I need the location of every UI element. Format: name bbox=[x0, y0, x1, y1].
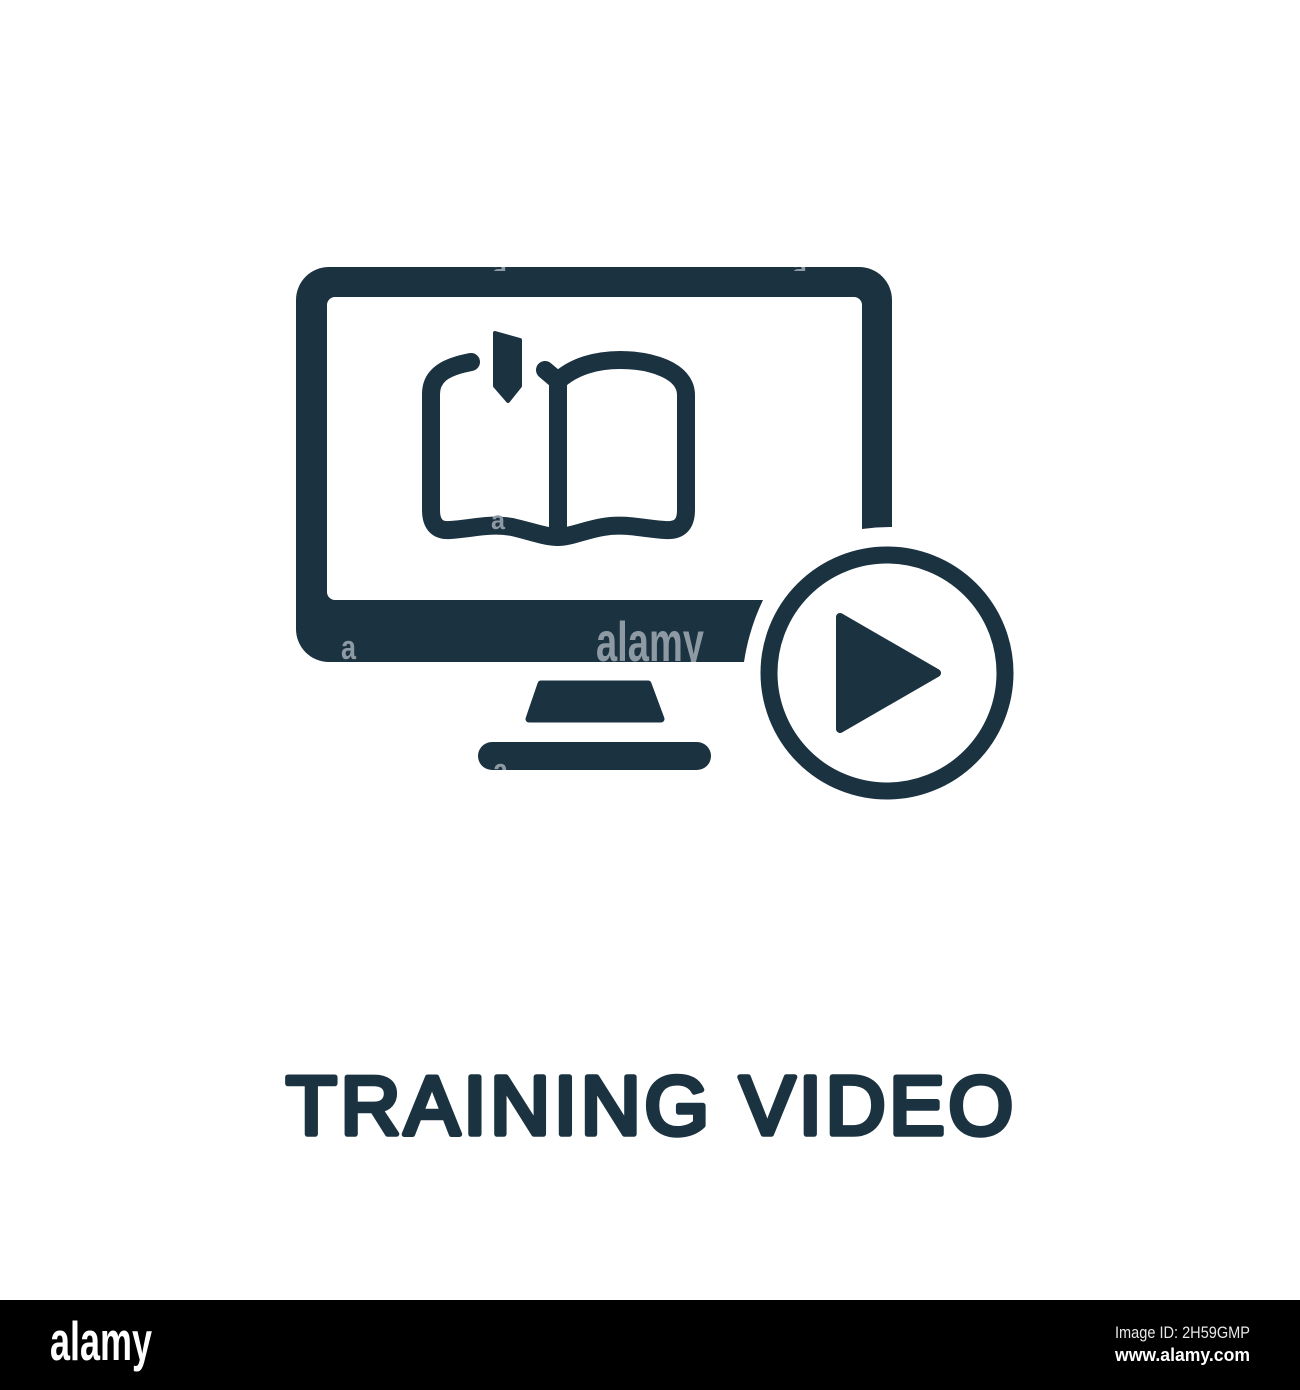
watermark: small letter on book: a bbox=[491, 505, 506, 535]
footer logo: alamy bbox=[50, 1310, 152, 1372]
icon: monitor with book and play button bbox=[296, 267, 1005, 791]
book pages outline bbox=[431, 360, 686, 537]
monitor stand bbox=[529, 684, 661, 719]
icon: open book bbox=[431, 360, 686, 537]
watermark: small letter on base: a bbox=[493, 752, 509, 790]
icon: play triangle bbox=[840, 617, 937, 729]
footer bar bbox=[0, 1300, 1300, 1390]
image id: Image ID: 2H59GMP bbox=[1115, 1323, 1250, 1342]
title: TRAINING VIDEO bbox=[286, 1059, 1013, 1152]
watermark: marks on monitor top bbox=[494, 267, 806, 271]
watermark: marks on monitor top: a bbox=[792, 250, 808, 288]
website: www.alamy.com bbox=[1114, 1345, 1250, 1365]
watermark: marks on monitor top: a bbox=[492, 250, 508, 288]
book spine bbox=[545, 370, 558, 537]
watermark: small letter on monitor: a bbox=[341, 629, 357, 667]
monitor base bbox=[478, 742, 711, 770]
watermark: alamy on monitor: alamy bbox=[596, 610, 704, 673]
icon: play circle bbox=[769, 555, 1005, 791]
icon: bookmark bbox=[495, 333, 520, 401]
monitor frame bbox=[296, 267, 892, 662]
